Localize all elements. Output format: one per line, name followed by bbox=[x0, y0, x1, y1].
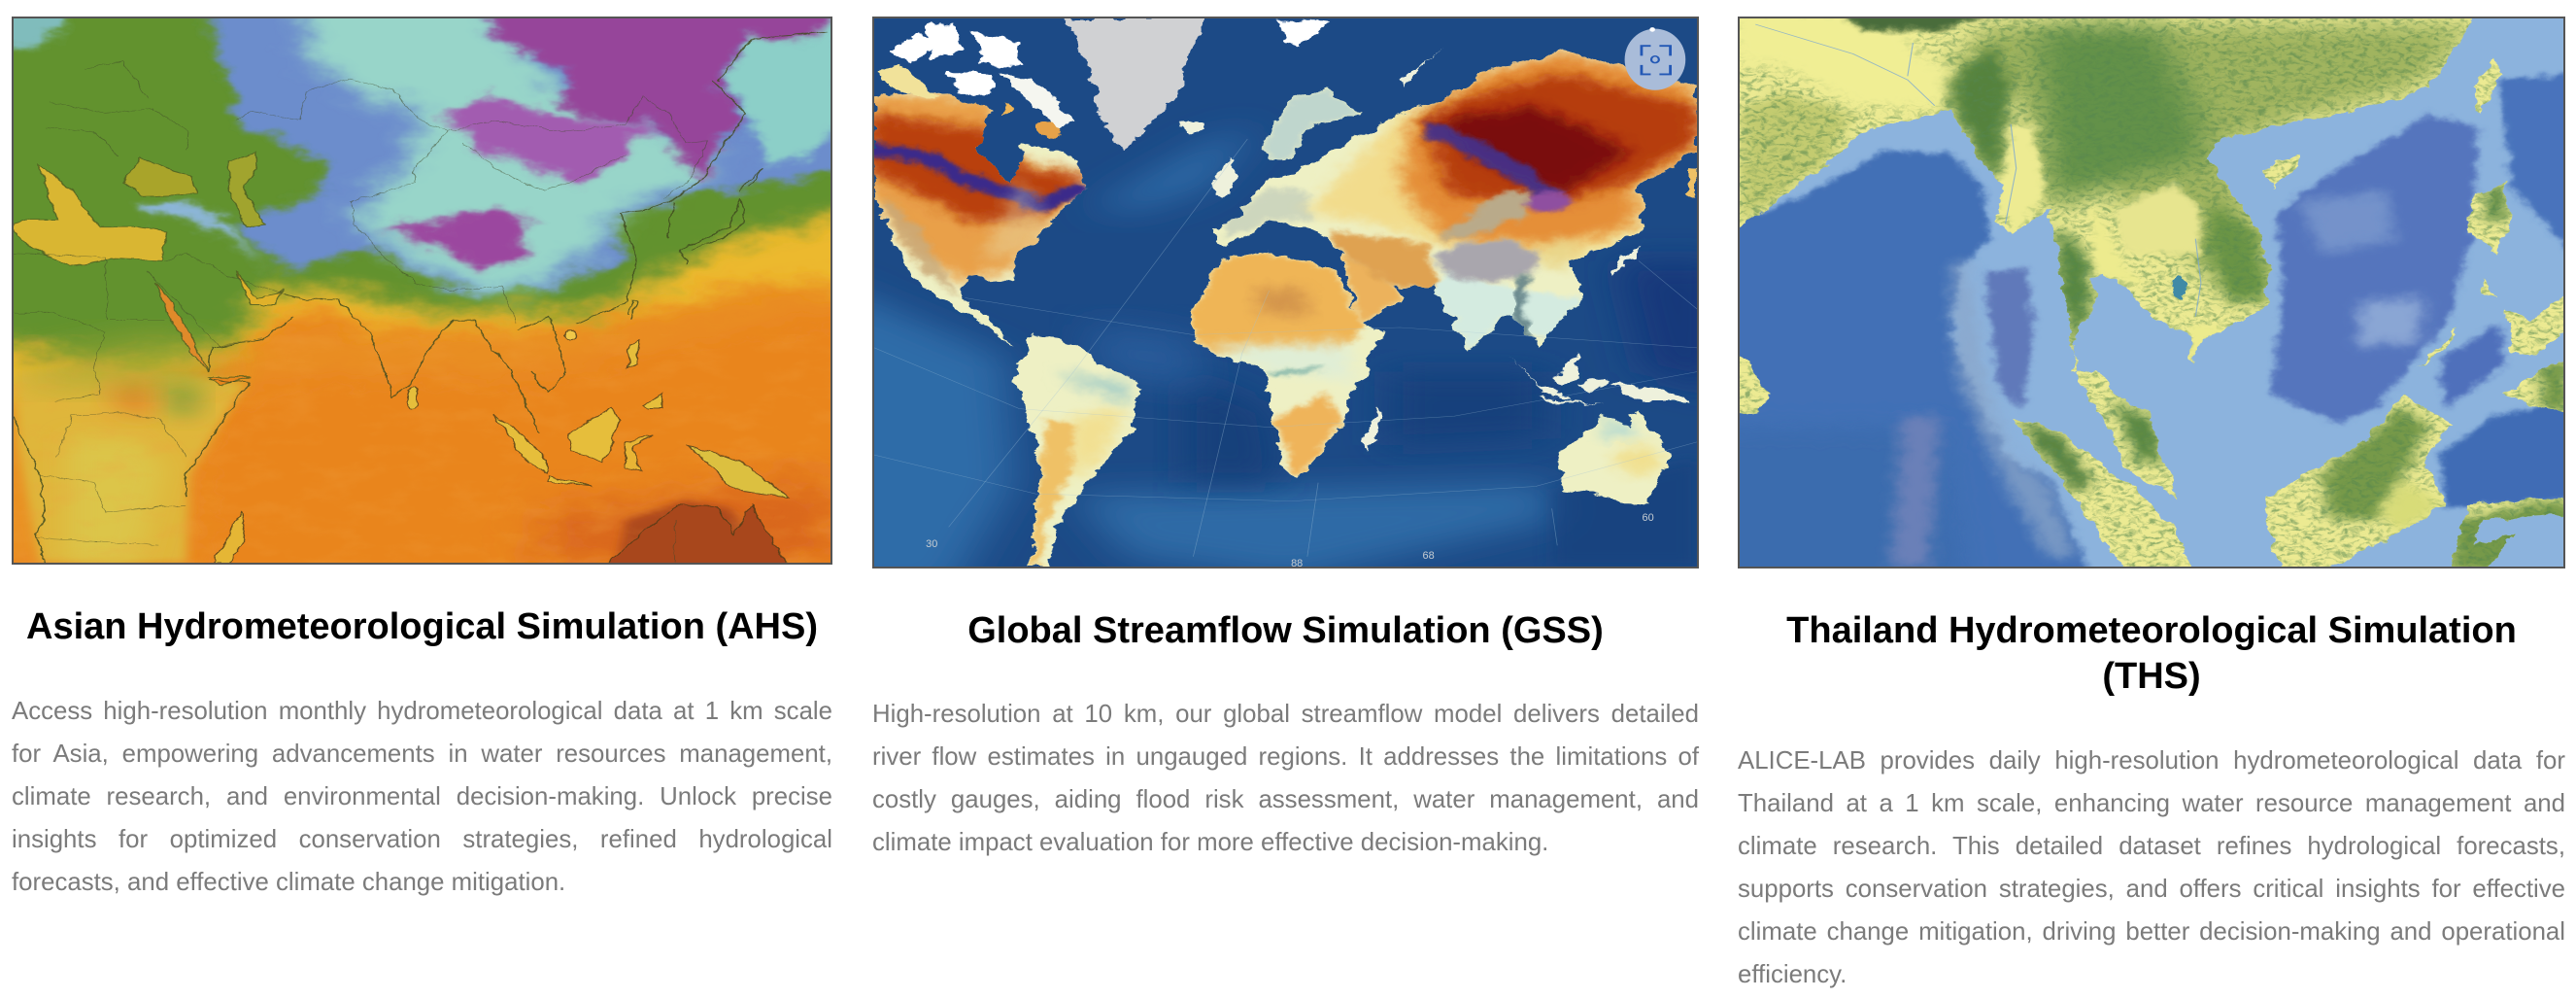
text: AHS description bbox=[12, 698, 832, 896]
islands: Southeast Asia, Sri Lanka, Madagascar, Australia bbox=[214, 330, 789, 568]
text: THS description: climate change mitigation, driving better decision-making and operational bbox=[1738, 918, 2565, 946]
text: AHS description: climate research, and environmental decision-making. Unlock precise bbox=[12, 783, 832, 810]
panel: Global Streamflow Simulation bbox=[872, 17, 1700, 856]
text: AHS description: Access high-resolution monthly hydrometeorological data at 1 km scale bbox=[12, 698, 832, 725]
land: Africa and Australia temperature bbox=[14, 334, 830, 578]
text: THS description: climate research. This detailed dataset refines hydrological forecasts, bbox=[1738, 833, 2565, 860]
text: THS description: supports conservation strategies, and offers critical insights for effective bbox=[1738, 876, 2565, 903]
heading: THS: (THS) bbox=[2102, 656, 2201, 697]
text: GSS description: river flow estimates in ungauged regions. It addresses the limitations of bbox=[872, 743, 1699, 771]
graticule lines bbox=[874, 139, 1697, 557]
text: GSS description bbox=[872, 701, 1700, 856]
map graticule labels: 30 bbox=[926, 538, 937, 550]
text: THS description: ALICE-LAB provides daily high-resolution hydrometeorological data for bbox=[1738, 747, 2565, 775]
map graticule labels: 60 bbox=[1642, 512, 1654, 524]
map: global streamflow bbox=[872, 17, 1699, 568]
heading: THS bbox=[1786, 610, 2517, 697]
text: GSS description: climate impact evaluation for more effective decision-making. bbox=[872, 829, 1548, 856]
land: relief shading bbox=[1740, 18, 2563, 567]
text: GSS description: costly gauges, aiding flood risk assessment, water management, and bbox=[872, 786, 1699, 813]
map graticule labels bbox=[926, 512, 1654, 569]
text: THS description: Thailand at a 1 km scale, enhancing water resource management and bbox=[1738, 790, 2565, 817]
text: THS description: efficiency. bbox=[1738, 961, 1847, 988]
heading: GSS: Global Streamflow Simulation (GSS) bbox=[967, 610, 1604, 651]
text: AHS description: insights for optimized conservation strategies, refined hydrological bbox=[12, 826, 832, 853]
land: coastlines of Asia, Africa and Oceania bbox=[14, 32, 827, 563]
map: Asia temperature field bbox=[12, 17, 832, 565]
icon: screenshot lens button bbox=[1625, 27, 1685, 90]
ocean bbox=[830, 18, 1726, 594]
text: GSS description: High-resolution at 10 km, our global streamflow model delivers detailed bbox=[872, 701, 1699, 728]
heading: AHS: Asian Hydrometeorological Simulation (AHS) bbox=[26, 606, 818, 647]
ocean: shallow shelves and deep basins bbox=[1690, 0, 2576, 608]
ocean and land temperature background bbox=[0, 0, 892, 608]
seas: Mediterranean, Black Sea, Caspian, Red Sea bbox=[14, 152, 284, 385]
text: AHS description: forecasts, and effective climate change mitigation. bbox=[12, 869, 565, 896]
arctic islands, Iceland, UK, Madagascar, Japan and Indonesia bbox=[878, 20, 1697, 451]
country borders bbox=[14, 61, 707, 563]
text: THS description bbox=[1738, 747, 2565, 988]
panel: Asian Hydrometeorological Simulation bbox=[12, 17, 832, 896]
text: AHS description: for Asia, empowering advancements in water resources management, bbox=[12, 741, 832, 768]
map graticule labels: 68 bbox=[1422, 550, 1435, 562]
icon: Greenland ice sheet bbox=[1066, 18, 1204, 151]
panel: Thailand Hydrometeorological Simulation bbox=[1738, 17, 2565, 988]
land: continents with runoff colours bbox=[867, 18, 1697, 567]
heading: THS: Thailand Hydrometeorological Simulation bbox=[1786, 610, 2517, 651]
map: Southeast Asia relief bbox=[1738, 17, 2565, 568]
water: rivers bbox=[1755, 24, 2201, 317]
